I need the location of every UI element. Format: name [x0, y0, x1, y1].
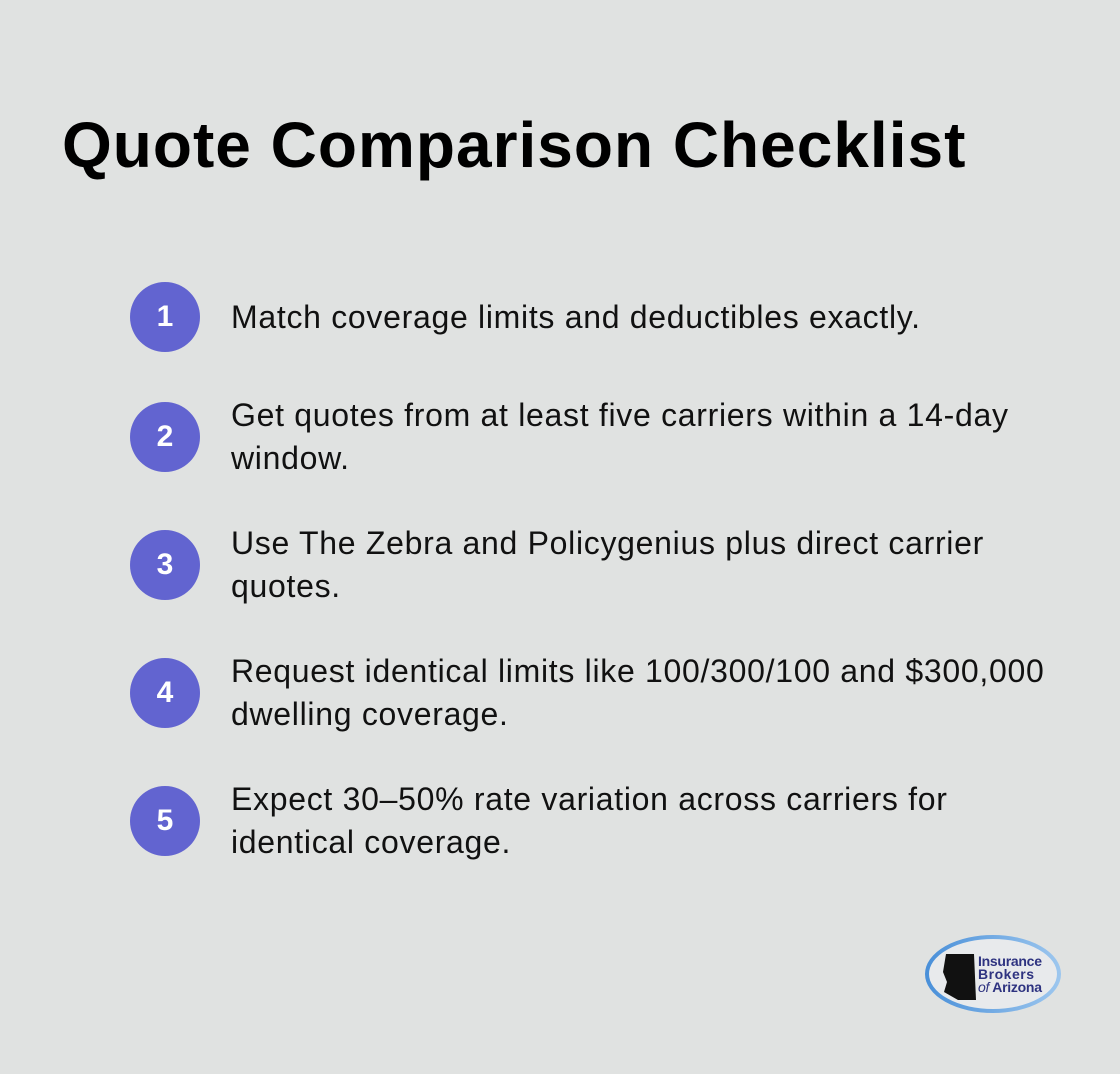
- logo: [925, 935, 1061, 1013]
- number badge 5: [130, 786, 200, 856]
- item 4: [130, 653, 1044, 732]
- text 2: Get quotes from at least five carriers within a 14-day window.: [231, 397, 1009, 476]
- number badge 2: 2: [157, 420, 173, 453]
- item 1: [130, 282, 921, 352]
- item 5: [130, 781, 948, 860]
- text 4: Request identical limits like 100/300/100 and $300,000 dwelling coverage.: [231, 653, 1044, 732]
- title: Quote Comparison Checklist: [62, 109, 966, 181]
- text 3: Use The Zebra and Policygenius plus direct carrier quotes.: [231, 525, 984, 604]
- number badge 1: [130, 282, 200, 352]
- logo ellipse: [927, 937, 1059, 1011]
- logo text: of Arizona: [978, 979, 1042, 995]
- item 3: [130, 525, 984, 604]
- logo text: Insurance: [978, 953, 1042, 969]
- number badge 3: 3: [157, 548, 173, 581]
- number badge 4: 4: [157, 676, 173, 709]
- number badge 2: [130, 402, 200, 472]
- item 2: [130, 397, 1009, 476]
- number badge 5: 5: [157, 804, 173, 837]
- logo arizona shape: [943, 954, 976, 1000]
- text 5: Expect 30–50% rate variation across carriers for identical coverage.: [231, 781, 948, 860]
- number badge 1: 1: [157, 300, 173, 333]
- number badge 4: [130, 658, 200, 728]
- text 1: Match coverage limits and deductibles exactly.: [231, 298, 921, 334]
- number badge 3: [130, 530, 200, 600]
- logo text: [978, 953, 1042, 995]
- logo text: Brokers: [978, 966, 1034, 982]
